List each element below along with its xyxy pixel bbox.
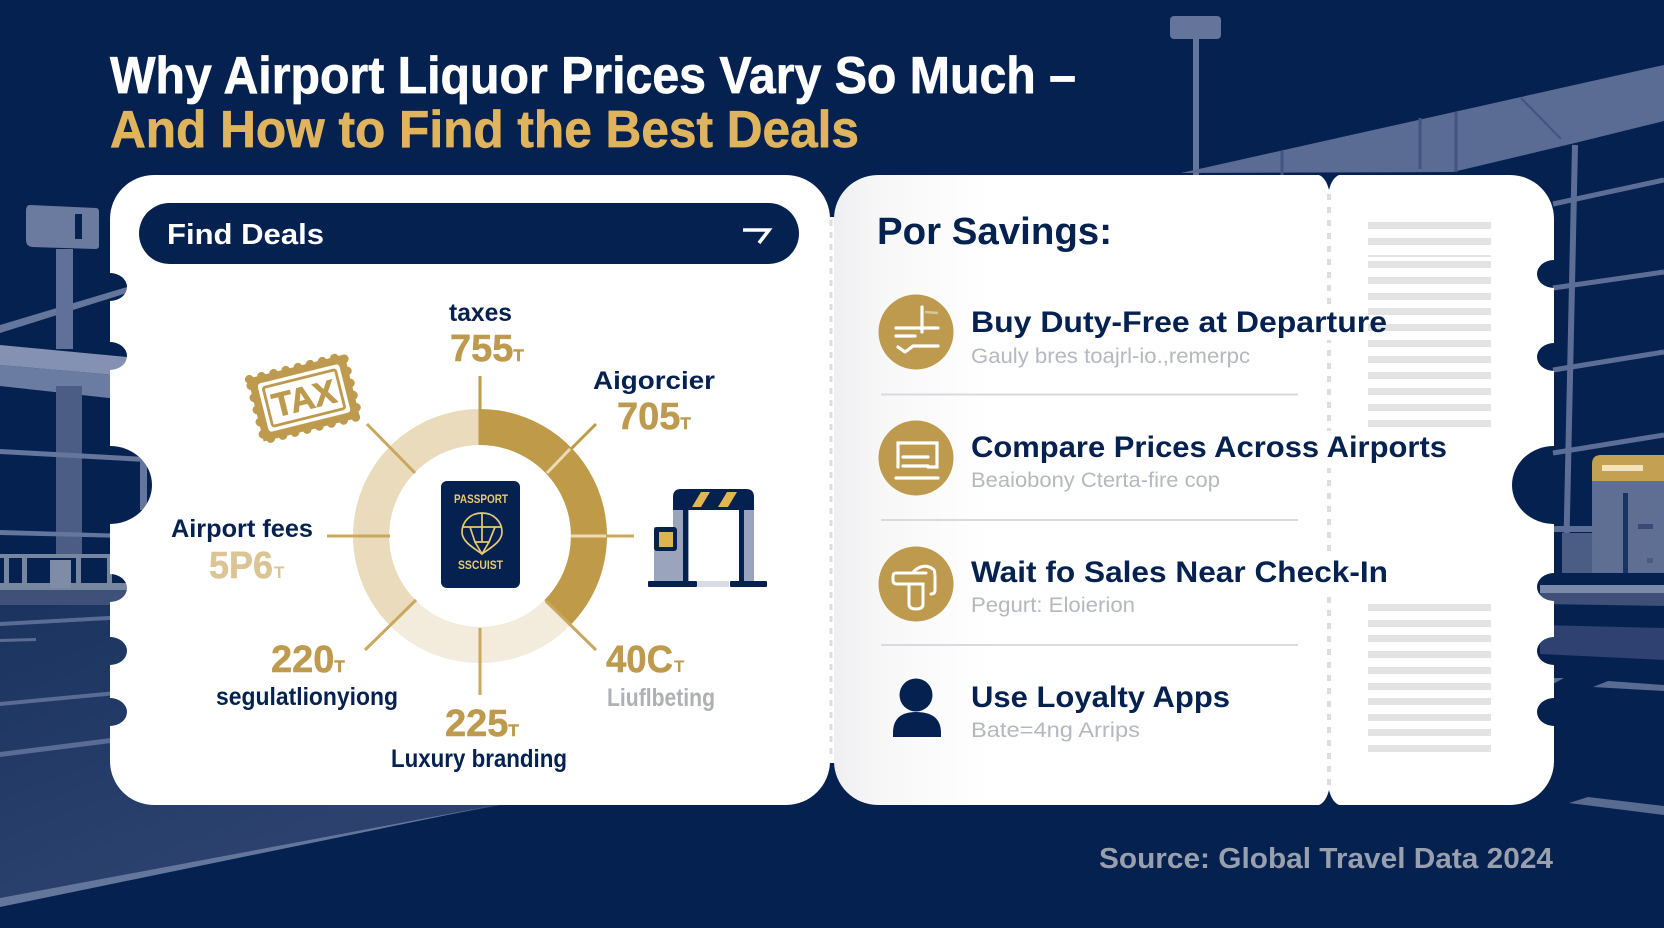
label: marketing bbox=[606, 639, 715, 712]
tip 3: wait for sales bbox=[878, 546, 1388, 622]
label: regulation: segulatlionyiong bbox=[216, 683, 398, 711]
source note: Source: Global Travel Data 2024 bbox=[1099, 843, 1553, 875]
label: regulation bbox=[216, 639, 398, 711]
label: luxury branding: Luxury branding bbox=[391, 745, 567, 773]
heading: savings: Por Savings: bbox=[877, 211, 1112, 253]
label: taxes: 755T bbox=[450, 328, 524, 370]
icon: passport: SSCUIST bbox=[458, 558, 504, 572]
label: marketing: Liuflbeting bbox=[607, 684, 715, 712]
find deals button bbox=[139, 203, 799, 264]
tip 4: loyalty apps bbox=[893, 678, 1230, 742]
background: right airport roof and windows bbox=[1170, 16, 1664, 573]
icon: tax stamp bbox=[248, 355, 360, 441]
label: airport fees: T bbox=[274, 563, 285, 582]
tip 3: wait for sales: Wait fo Sales Near Check-In bbox=[971, 556, 1388, 589]
tip 1: buy duty-free: Gauly bres toajrl-io.,remerpc bbox=[971, 345, 1250, 368]
label: airport concession: 705T bbox=[617, 396, 691, 438]
icon: security gate bbox=[648, 489, 767, 587]
tip 2: compare prices bbox=[878, 420, 1447, 496]
stripes: decorative receipt lines top bbox=[1368, 222, 1491, 427]
panel: find deals ticket bbox=[110, 175, 838, 805]
label: marketing: 40C bbox=[606, 639, 673, 681]
icon: passport: PASSPORT bbox=[454, 492, 509, 506]
icon: passport bbox=[441, 481, 520, 588]
title: Why Airport Liquor Prices Vary So Much – bbox=[110, 47, 1076, 105]
title: And How to Find the Best Deals bbox=[110, 101, 859, 159]
label: regulation: 220T bbox=[271, 639, 345, 681]
tip 4: loyalty apps: Use Loyalty Apps bbox=[971, 681, 1230, 714]
panel: savings ticket bbox=[831, 175, 1554, 805]
label: taxes bbox=[449, 299, 524, 370]
tip 3: wait for sales: Pegurt: Eloierion bbox=[971, 594, 1135, 617]
icon: tax stamp: TAX bbox=[269, 373, 341, 425]
label: airport fees bbox=[171, 515, 313, 587]
donut chart bbox=[327, 376, 634, 695]
background: left airport structure bbox=[0, 205, 560, 907]
label: taxes: taxes bbox=[449, 299, 512, 327]
label: airport fees: 5P6 bbox=[209, 545, 273, 587]
stripes: decorative receipt lines bottom bbox=[1368, 604, 1491, 752]
label: luxury branding: 225T bbox=[445, 703, 519, 745]
title bbox=[110, 47, 1076, 159]
label: airport fees: Airport fees bbox=[171, 515, 313, 543]
label: luxury branding bbox=[391, 703, 567, 773]
tip 2: compare prices: Compare Prices Across Airports bbox=[971, 431, 1447, 464]
find deals button: Find Deals bbox=[167, 219, 324, 251]
tip 4: loyalty apps: Bate=4ng Arrips bbox=[971, 719, 1140, 742]
label: airport concession: Aigorcier bbox=[593, 367, 715, 395]
label: marketing: T bbox=[674, 657, 685, 676]
tip 1: buy duty-free bbox=[878, 294, 1387, 370]
tip 1: buy duty-free: Buy Duty-Free at Departure bbox=[971, 306, 1387, 339]
background: right check-in counter bbox=[1540, 455, 1664, 815]
tip 2: compare prices: Beaiobony Cterta-fire cop bbox=[971, 469, 1220, 492]
label: airport concession bbox=[593, 367, 715, 438]
